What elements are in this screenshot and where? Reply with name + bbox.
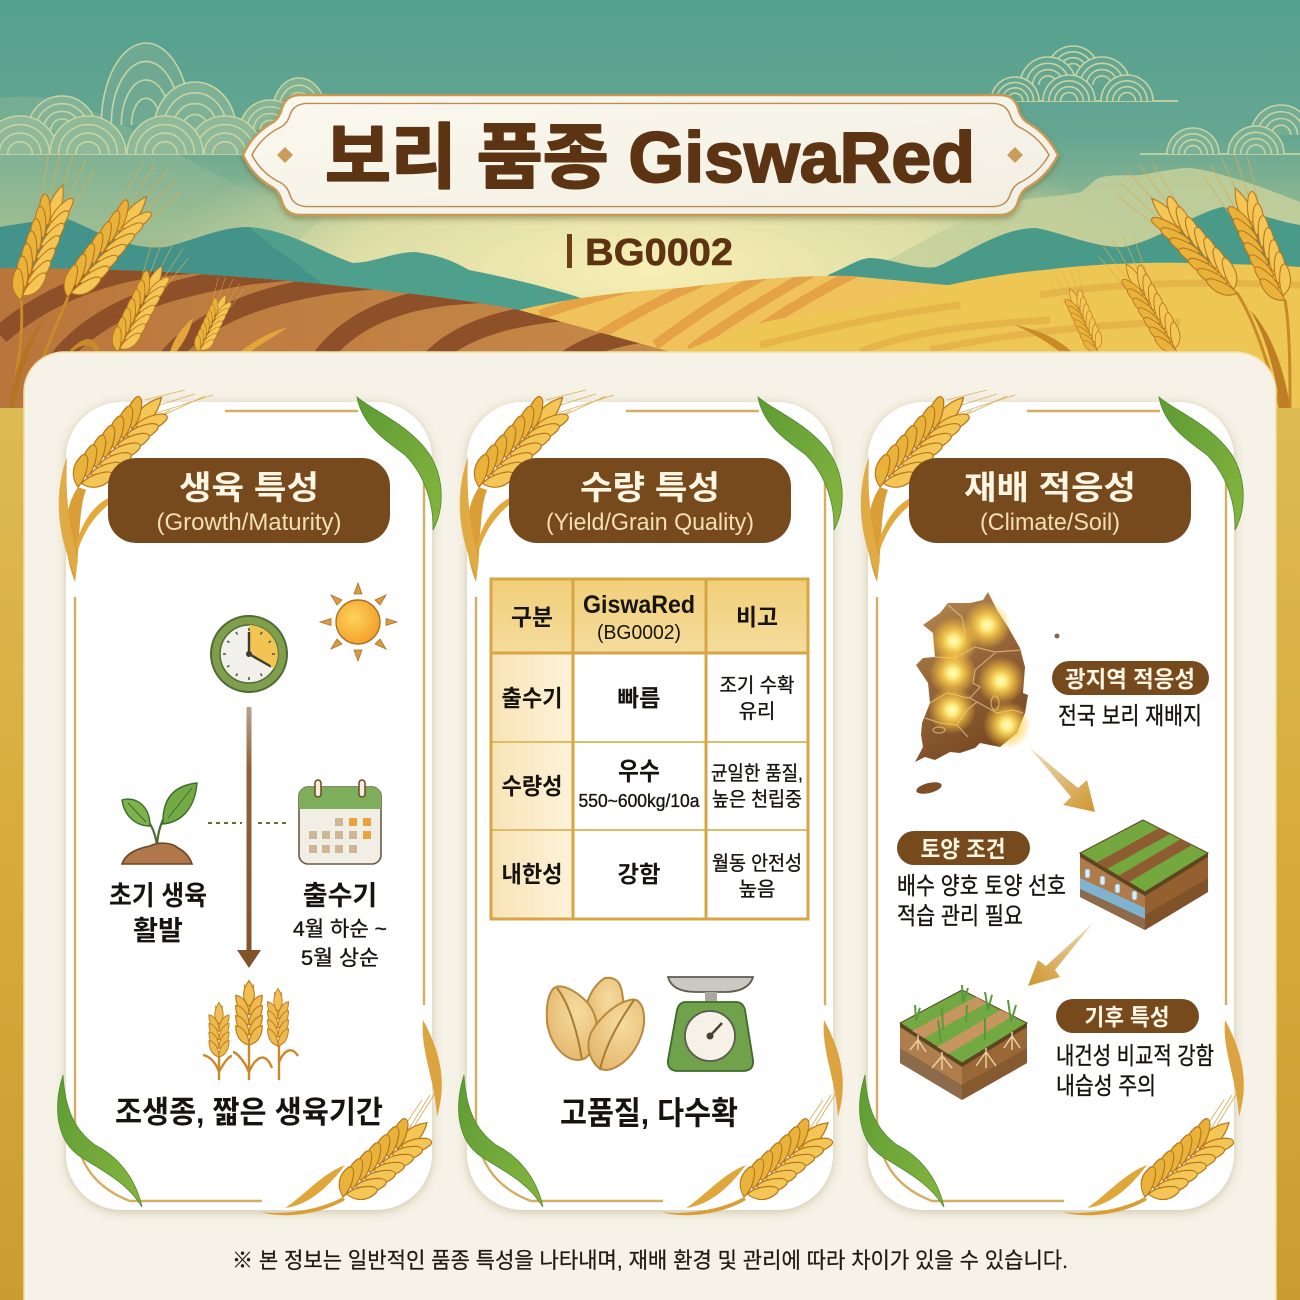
row: yield: 550~600kg/10a <box>578 791 700 811</box>
callout: wide adaptability <box>1052 661 1209 730</box>
row: heading date: 유리 <box>739 700 775 723</box>
table header: (BG0002) <box>597 622 681 644</box>
panel: yield <box>459 385 843 1215</box>
table header: 구분 <box>511 604 553 630</box>
comparison table <box>491 579 808 919</box>
row: cold tolerance: 내한성 <box>502 861 562 887</box>
callout: soil condition: 배수 양호 토양 선호 <box>897 873 1066 900</box>
callout: climate: 내습성 주의 <box>1056 1073 1156 1100</box>
callout: wide adaptability: 광지역 적응성 <box>1065 666 1195 692</box>
brown striped field <box>0 268 669 408</box>
label: heading date: 4월 하순 ~ <box>293 918 387 941</box>
row: yield: 우수 <box>618 758 660 786</box>
row: heading date <box>502 674 794 723</box>
row: cold tolerance: 월동 안전성 <box>712 852 802 875</box>
title text: 보리 품종 GiswaRed <box>325 119 975 198</box>
gold striped middle field <box>519 276 949 352</box>
heading pill: growth: 생육 특성 <box>179 469 319 506</box>
panel: growth <box>58 385 442 1215</box>
heading pill: growth <box>108 458 390 543</box>
heading pill: yield: (Yield/Grain Quality) <box>546 509 754 536</box>
summary: growth: 조생종, 짧은 생육기간 <box>115 1095 383 1130</box>
banner wheat right <box>1015 148 1300 408</box>
label: early growth: 초기 생육 <box>109 881 207 911</box>
main cream card <box>24 352 1276 1300</box>
footnote: ※ 본 정보는 일반적인 품종 특성을 나타내며, 재배 환경 및 관리에 따라 차이가 있을 수 있습니다. <box>232 1248 1068 1273</box>
row: yield: 균일한 품질, <box>711 762 803 785</box>
label: heading date <box>293 881 387 970</box>
icon: scale <box>668 977 753 1071</box>
callout: soil condition: 토양 조건 <box>920 836 1006 862</box>
row: heading date: 빠름 <box>618 685 660 711</box>
icon: sun <box>320 583 397 661</box>
callout: wide adaptability: 전국 보리 재배지 <box>1058 703 1202 730</box>
table header: GiswaRed <box>583 591 695 619</box>
heading pill: adaptability: (Climate/Soil) <box>980 509 1120 536</box>
panel: adaptability <box>860 385 1244 1215</box>
heading pill: growth: (Growth/Maturity) <box>156 509 342 536</box>
label: early growth: 활발 <box>133 916 183 946</box>
callout: soil condition <box>897 831 1066 930</box>
table header: 비고 <box>736 604 778 630</box>
icon: drained soil block <box>1080 820 1208 930</box>
heading pill: yield: 수량 특성 <box>580 469 720 506</box>
gold front field <box>683 263 1300 408</box>
row: cold tolerance: 높음 <box>739 879 775 901</box>
callout: climate <box>1056 999 1214 1100</box>
icon: wheat trio <box>203 981 298 1080</box>
icon: rooted soil block <box>900 985 1027 1100</box>
mountains <box>0 219 581 310</box>
arrow: soil to climate <box>1028 923 1093 986</box>
banner landscape background <box>0 0 1300 415</box>
decorative clouds <box>0 43 1300 154</box>
row: cold tolerance: 강함 <box>618 861 660 887</box>
variety code: BG0002 <box>585 232 733 274</box>
map of Korea <box>915 592 1060 796</box>
icon: barley grains <box>547 978 644 1070</box>
gold lower background <box>0 408 1300 1300</box>
arrow: timeline <box>237 707 261 968</box>
row: heading date: 조기 수확 <box>720 674 794 697</box>
heading pill: adaptability <box>909 458 1191 543</box>
callout: climate: 기후 특성 <box>1084 1004 1170 1030</box>
row: yield <box>502 758 803 811</box>
label: heading date: 5월 상순 <box>301 947 379 970</box>
icon: seedling <box>122 783 197 864</box>
callout: soil condition: 적습 관리 필요 <box>897 903 1023 930</box>
dotted connector <box>208 822 290 824</box>
row: heading date: 출수기 <box>502 685 562 711</box>
title badge <box>243 95 1058 215</box>
row: cold tolerance <box>502 852 802 901</box>
summary: yield: 고품질, 다수확 <box>560 1095 738 1131</box>
arrow: map to soil <box>1030 748 1095 812</box>
banner wheat left <box>0 145 288 408</box>
row: yield: 수량성 <box>502 773 562 799</box>
icon: clock <box>211 616 287 692</box>
heading pill: yield <box>509 458 791 543</box>
table header <box>511 591 778 644</box>
label: heading date: 출수기 <box>303 881 377 911</box>
label: early growth <box>109 881 207 946</box>
heading pill: adaptability: 재배 적응성 <box>964 469 1136 506</box>
pale back hills <box>0 97 330 240</box>
callout: climate: 내건성 비교적 강함 <box>1056 1043 1214 1070</box>
row: yield: 높은 천립중 <box>712 788 802 811</box>
icon: calendar <box>299 780 381 864</box>
